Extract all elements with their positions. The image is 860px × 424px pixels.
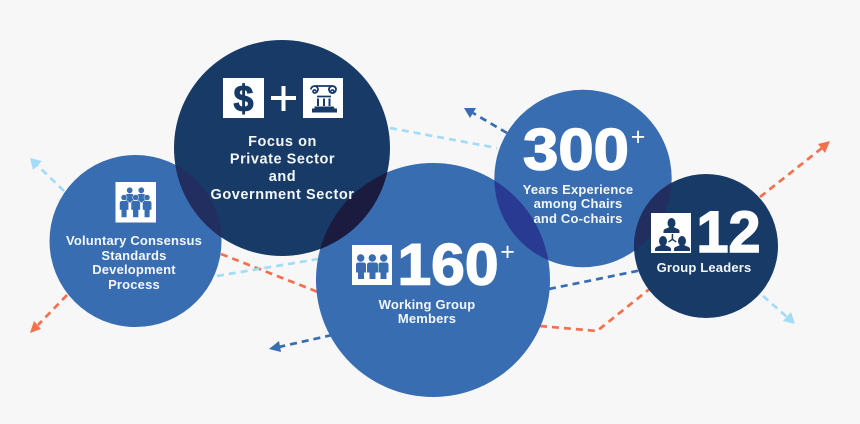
icon: column capital: [303, 78, 343, 118]
text: working group members: [379, 297, 475, 326]
circle: focus on sectors: [174, 40, 390, 256]
arrow: light blue upper left: [30, 158, 64, 191]
arrow: orange lower left: [30, 295, 67, 333]
icon: group leaders hierarchy: [651, 213, 691, 253]
text: focus on sectors: Focus on: [248, 134, 317, 150]
plus sign: 300: +: [631, 123, 645, 151]
number: 12: 12: [696, 200, 760, 265]
text: focus on sectors: Private Sector: [230, 152, 335, 168]
text: voluntary consensus: Process: [108, 277, 160, 292]
arrow: orange connector left: [221, 254, 318, 292]
arrow: blue connector right: [549, 270, 642, 289]
plus sign: 160: +: [500, 238, 515, 266]
circle: voluntary consensus: [50, 155, 222, 327]
text: focus on sectors: and: [269, 169, 296, 185]
icon: dollar sign: $: [234, 78, 254, 119]
arrow: light blue connector top: [390, 128, 497, 148]
text: voluntary consensus: Development: [92, 262, 176, 277]
text: focus on sectors: Government Sector: [211, 187, 354, 203]
overlap: working group and years: [494, 180, 548, 260]
icon: group of people: [116, 182, 156, 222]
text: years experience: among Chairs: [534, 196, 622, 211]
overlap: years and group leaders: [634, 182, 672, 251]
arrow: blue lower centre: [269, 335, 332, 352]
arrow: blue upper centre: [464, 108, 507, 133]
text: voluntary consensus: [66, 233, 202, 292]
icon: dollar sign: [223, 78, 264, 119]
overlap: focus and working group: [320, 172, 388, 249]
text: voluntary consensus: Voluntary Consensus: [66, 233, 202, 248]
circle: working group members: [316, 163, 550, 397]
circle: years experience: [494, 90, 672, 267]
text: focus on sectors: [211, 134, 354, 203]
text: years experience: Years Experience: [523, 182, 633, 197]
arrow: orange connector right: [540, 287, 652, 331]
text: working group members: Members: [398, 311, 456, 326]
text: group leaders: Group Leaders: [657, 260, 751, 275]
circle: group leaders: [634, 174, 778, 318]
overlap: voluntary and focus: [175, 164, 222, 238]
number: 160: 160: [398, 232, 498, 298]
arrow: orange upper right: [760, 141, 830, 197]
number: 300: 300: [523, 118, 629, 182]
text: years experience: and Co-chairs: [533, 211, 623, 226]
text: voluntary consensus: Standards: [101, 248, 167, 263]
icon: three people: [352, 245, 392, 285]
arrow: light blue lower right: [763, 296, 795, 324]
text: working group members: Working Group: [379, 297, 475, 312]
icon: plus: [271, 86, 296, 111]
arrow: light blue connector left: [217, 259, 318, 276]
text: years experience: [523, 182, 633, 226]
